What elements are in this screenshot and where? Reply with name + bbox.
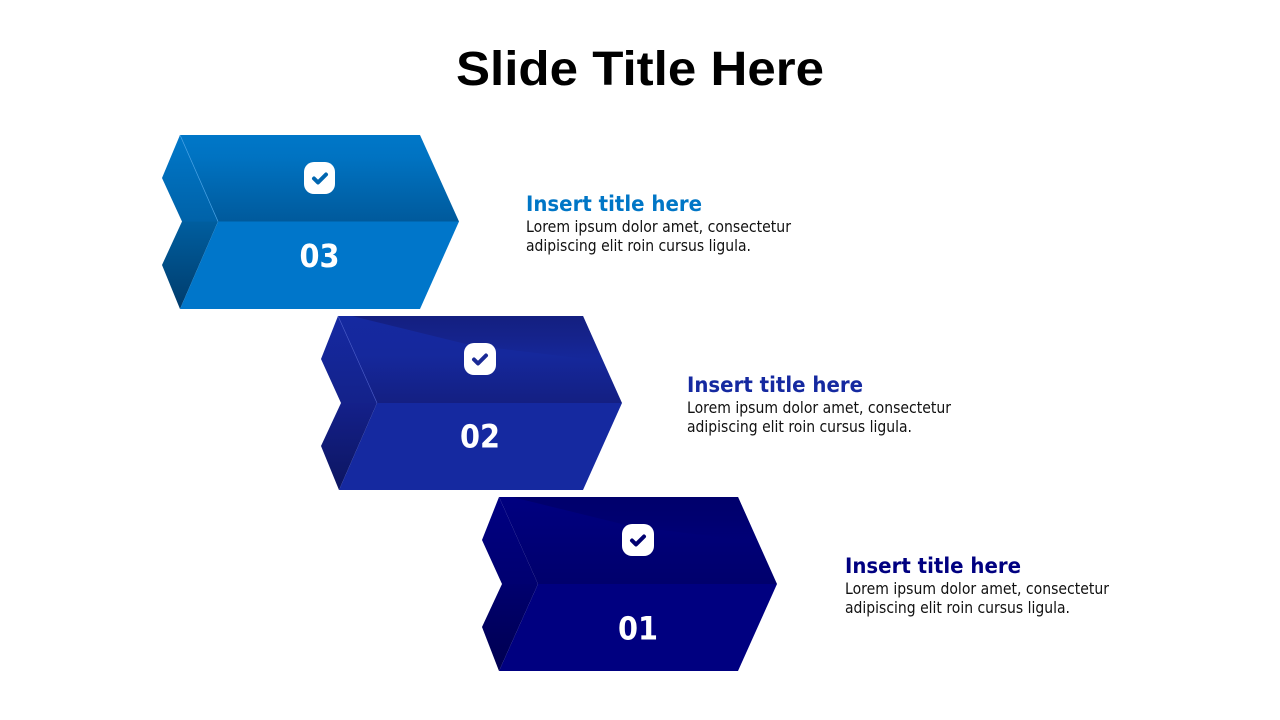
step 01 top face shadow wedge (512, 497, 758, 542)
step 01 description: adipiscing elit roin cursus ligula. (845, 598, 1070, 617)
step 03 heading: Insert title here (526, 192, 702, 216)
step 02 description: adipiscing elit roin cursus ligula. (687, 417, 912, 436)
step 01 upper left face (482, 497, 538, 584)
step 03 front face (180, 222, 459, 309)
step 03 upper left face (162, 135, 218, 222)
step 01 arrow block (482, 497, 777, 671)
step 01 text block (845, 554, 1114, 617)
step 03 text block (526, 192, 796, 255)
step 01 description: Lorem ipsum dolor amet, consectetur (845, 579, 1109, 598)
step 02 top face shadow wedge (352, 316, 603, 361)
step 01 check icon (622, 524, 654, 556)
step 03 check icon (304, 162, 335, 194)
step 02 check icon (464, 343, 496, 375)
step 03 description: Lorem ipsum dolor amet, consectetur (526, 217, 791, 236)
step 03 number: 03 (300, 237, 340, 275)
title: Slide Title Here (456, 43, 824, 96)
step 02 lower left face (321, 403, 377, 490)
step 03 arrow block (162, 135, 459, 309)
step 01 lower left face (482, 584, 538, 671)
step 02 number: 02 (460, 418, 500, 456)
step 01 heading: Insert title here (845, 554, 1021, 578)
step 01 number: 01 (618, 610, 658, 648)
step 02 description: Lorem ipsum dolor amet, consectetur (687, 398, 951, 417)
step 02 upper left face (321, 316, 377, 403)
step 03 lower left face (162, 222, 218, 309)
step 03 top face (180, 135, 459, 222)
step 02 arrow block (321, 316, 622, 490)
step 02 front face (339, 403, 622, 490)
step 02 heading: Insert title here (687, 373, 863, 397)
step 01 front face (499, 584, 777, 671)
step 03 description: adipiscing elit roin cursus ligula. (526, 236, 751, 255)
step 02 top face (338, 316, 622, 403)
step 02 text block (687, 373, 956, 436)
step 01 top face (499, 497, 777, 584)
